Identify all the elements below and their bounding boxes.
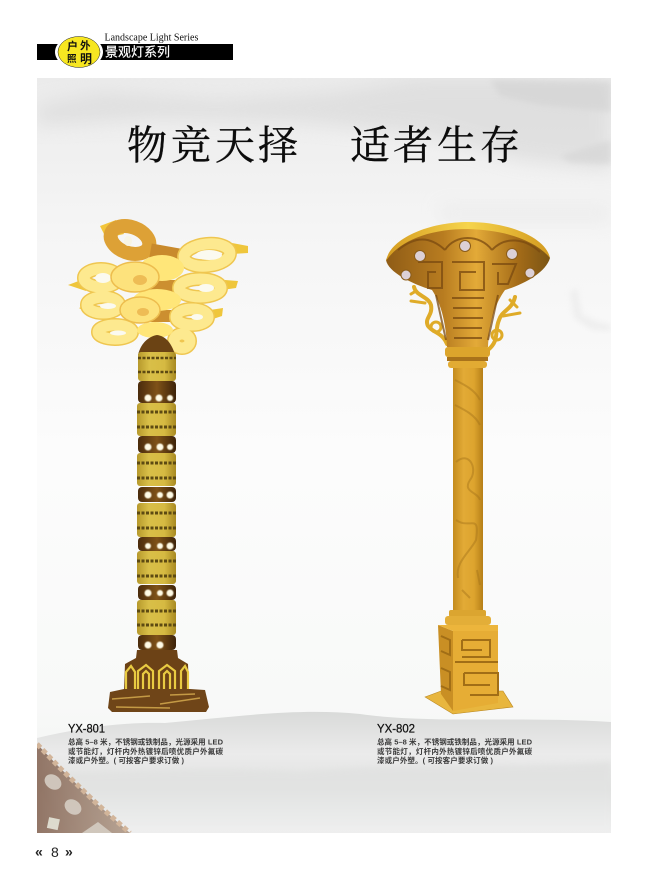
header english subtitle: Landscape Light Series <box>104 32 198 44</box>
distant hills <box>37 712 611 808</box>
lamp 802 shade cone <box>386 224 550 347</box>
lamp 801 flower head <box>68 220 248 348</box>
lamp 802 square base <box>438 625 498 711</box>
yellow torus rings <box>84 242 231 348</box>
header: series banner <box>37 32 233 69</box>
title: 择 <box>258 114 298 171</box>
description 801: 总高 5–8 米，不锈钢或铁制品，光源采用 LED <box>68 736 224 746</box>
lamp: YX-802 <box>386 222 550 714</box>
lamp 801 base <box>108 650 209 712</box>
description 801: 或节能灯，灯杆内外热镀锌后喷优质户外氟碳 <box>68 746 224 756</box>
description 802: 总高 5–8 米，不锈钢或铁制品，光源采用 LED <box>377 736 533 746</box>
lamp 802 dragon relief <box>455 380 480 598</box>
header chinese title: 景观灯系列 <box>105 44 170 60</box>
title: 竞 <box>171 114 211 171</box>
temple roof corner <box>37 744 130 833</box>
description 802: 或节能灯，灯杆内外热镀锌后喷优质户外氟碳 <box>377 746 532 756</box>
description 801 <box>68 736 224 765</box>
lamp: YX-801 <box>68 220 248 712</box>
description 802 <box>377 736 533 765</box>
title: 者 <box>393 114 433 171</box>
title: 适 <box>350 114 390 171</box>
page number: » <box>65 844 73 860</box>
header white logo halo <box>55 35 103 69</box>
lamp 802 base plate <box>425 691 513 714</box>
lower mist <box>37 762 611 833</box>
orange hub bands <box>149 244 183 265</box>
description 801: 漆或户外塑。( 可按客户要求订做 ) <box>68 755 184 765</box>
caption: YX-801 <box>68 722 224 765</box>
logo: yellow badge: 户 <box>67 38 78 54</box>
title <box>127 114 520 171</box>
inner rings <box>111 262 160 323</box>
title: 存 <box>480 114 520 171</box>
description 802: 漆或户外塑。( 可按客户要求订做 ) <box>377 755 494 765</box>
model name 801: YX-801 <box>68 722 105 736</box>
lamp 802 dragon ornaments <box>411 270 520 350</box>
page number: « <box>35 844 43 860</box>
back brown ring <box>100 220 124 238</box>
lamp 802 fret pattern <box>398 238 540 340</box>
page number <box>35 844 73 860</box>
title: 生 <box>437 114 477 171</box>
tabs <box>68 243 248 341</box>
caption: YX-802 <box>377 722 533 765</box>
lamp 801 column cap <box>138 335 175 355</box>
lamp 801 column segments <box>137 352 176 650</box>
lamp 802 plinth steps <box>445 610 491 625</box>
logo: yellow badge: 照 <box>67 51 77 65</box>
ink clouds at top <box>37 78 611 331</box>
title: 天 <box>215 114 255 171</box>
lamp 802 shade lights <box>401 240 535 280</box>
header black bar <box>37 44 233 60</box>
lamp 802 collar <box>445 347 490 368</box>
ring outlines <box>84 242 231 348</box>
lamp 802 rim <box>386 222 550 261</box>
page number: 8 <box>51 844 59 860</box>
logo: yellow badge: 明 <box>80 50 92 67</box>
model name 802: YX-802 <box>377 722 415 736</box>
title: 物 <box>127 114 167 171</box>
panel: ink wash background <box>37 78 611 833</box>
logo: yellow badge: 外 <box>80 38 91 53</box>
discs <box>133 255 184 338</box>
logo: yellow badge <box>58 36 100 68</box>
lamp 802 shaft <box>453 368 483 611</box>
